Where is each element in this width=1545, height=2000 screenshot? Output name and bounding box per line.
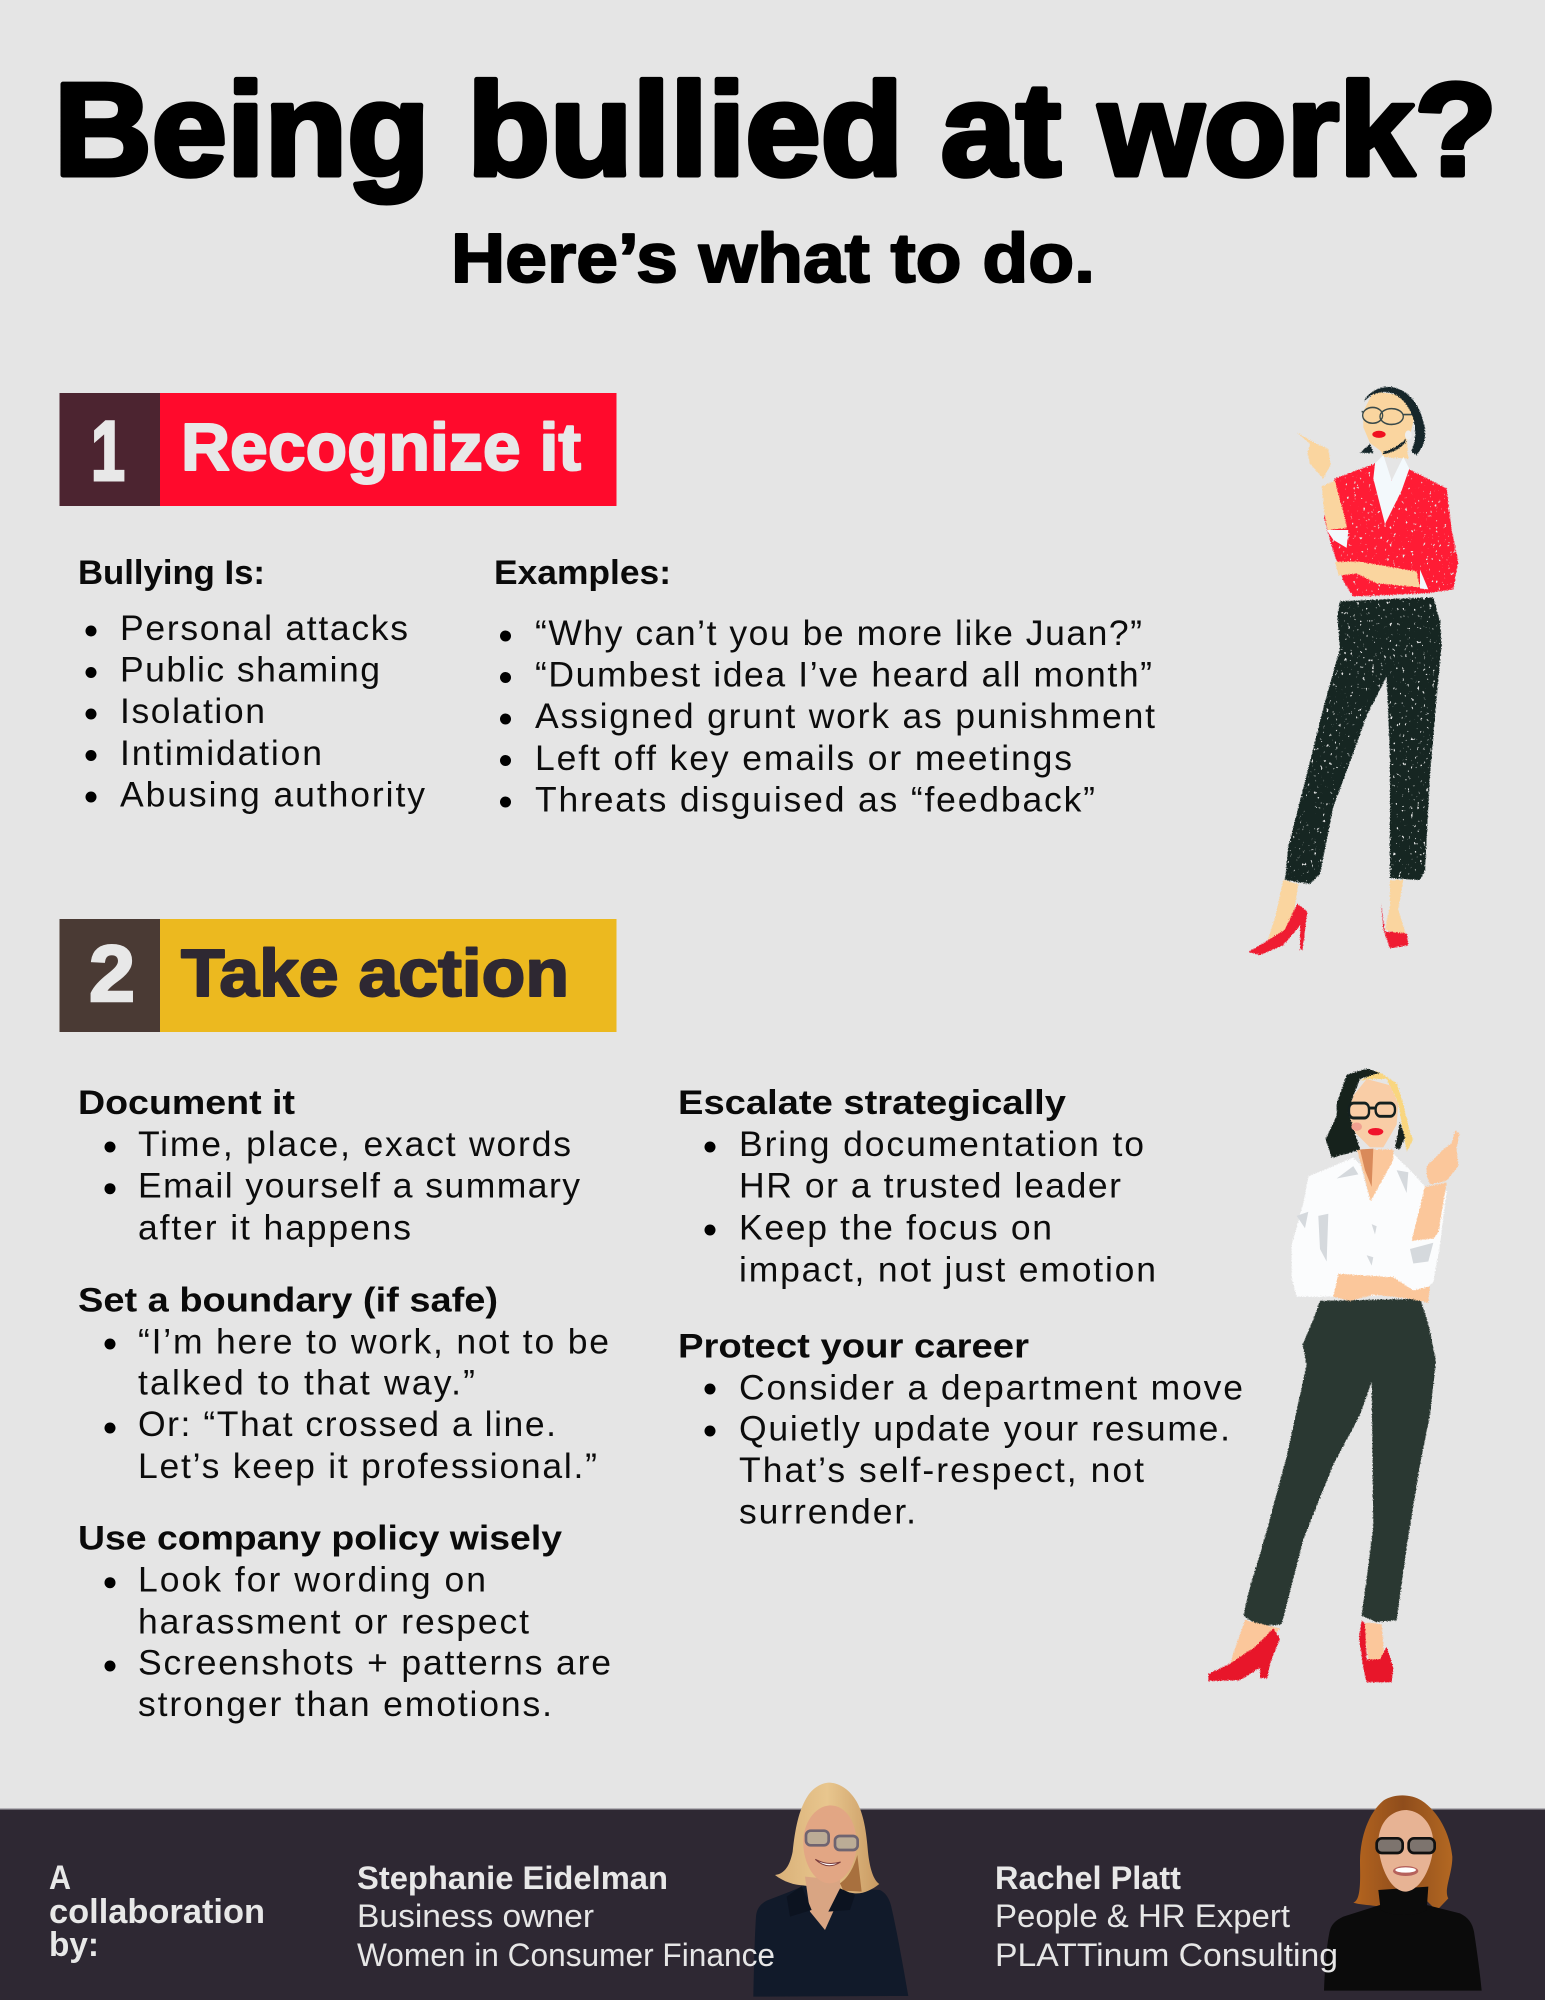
credit: Rachel Platt: Rachel Platt: [995, 1860, 1181, 1896]
protect your career: Quietly update your resume.: [739, 1408, 1230, 1448]
section 1 banner: Recognize it: [181, 410, 581, 485]
examples list: “Why can’t you be more like Juan?”: [535, 613, 1142, 653]
skin parts: [1230, 1131, 1459, 1668]
shirt folds: [1297, 1166, 1433, 1266]
protect your career: Protect your career: [678, 1327, 1029, 1365]
collaboration label: A: [49, 1859, 71, 1897]
sweater: [1324, 1905, 1482, 1991]
hair: [775, 1783, 879, 1893]
document it: after it happens: [138, 1207, 411, 1247]
glasses: [1349, 1103, 1395, 1118]
subtitle: Here’s what to do.: [451, 219, 1095, 297]
credit: Rachel Platt: PLATTinum Consulting: [995, 1937, 1338, 1973]
examples list: “Dumbest idea I’ve heard all month”: [535, 654, 1152, 694]
set a boundary: talked to that way.”: [138, 1362, 475, 1402]
bullying is list: Isolation: [120, 691, 265, 731]
footer band: [0, 1808, 1545, 2000]
trousers: [1285, 597, 1442, 884]
blonde hair: [1360, 1071, 1413, 1152]
hair: [1353, 1795, 1452, 1911]
illustration: woman in white shirt: [1208, 1069, 1459, 1682]
examples list: [494, 554, 1155, 820]
bullying is list: Intimidation: [120, 733, 322, 773]
escalate strategically: Keep the focus on: [739, 1207, 1052, 1247]
illustration: woman in red sweater: [1248, 387, 1458, 955]
document it: Email yourself a summary: [138, 1166, 580, 1206]
shirt: [753, 1886, 908, 1997]
blush and lips: [1351, 1123, 1362, 1131]
escalate strategically: [678, 1084, 1156, 1290]
collaboration label: [49, 1859, 265, 1964]
escalate strategically: impact, not just emotion: [739, 1250, 1156, 1290]
smile: [1393, 1866, 1418, 1876]
credit: Stephanie Eidelman: Stephanie Eidelman: [357, 1860, 668, 1896]
set a boundary: Or: “That crossed a line.: [138, 1404, 556, 1444]
bullying is list: Public shaming: [120, 650, 380, 690]
credit: Stephanie Eidelman: Business owner: [357, 1898, 594, 1934]
shoes: [1248, 904, 1408, 955]
set a boundary: Set a boundary (if safe): [78, 1281, 498, 1319]
escalate strategically: Escalate strategically: [678, 1084, 1066, 1122]
panel: take action: [60, 919, 1243, 1724]
use company policy wisely: Screenshots + patterns are: [138, 1643, 611, 1683]
shirt: [1292, 1154, 1447, 1297]
section 1 banner: 1: [91, 404, 125, 498]
collar: [787, 1886, 812, 1917]
collaboration label: collaboration: [49, 1893, 265, 1931]
smile: [815, 1859, 841, 1866]
examples list: Left off key emails or meetings: [535, 738, 1072, 778]
examples list: Examples:: [494, 554, 671, 592]
bullying is list: Bullying Is:: [78, 554, 265, 592]
credit: Stephanie Eidelman: [357, 1860, 775, 1973]
use company policy wisely: Use company policy wisely: [78, 1519, 562, 1557]
neck shadow: [1360, 1149, 1373, 1187]
protect your career: That’s self-respect, not: [739, 1450, 1144, 1490]
protect your career: surrender.: [739, 1491, 916, 1531]
section 1 banner: [60, 393, 616, 506]
neck: [805, 1877, 841, 1930]
document it: Time, place, exact words: [138, 1124, 571, 1164]
bullying is list: Abusing authority: [120, 774, 425, 814]
use company policy wisely: harassment or respect: [138, 1601, 529, 1641]
hair lower side shadows: [840, 1855, 862, 1892]
bullying is list: Personal attacks: [120, 608, 408, 648]
photo: Stephanie Eidelman: [753, 1783, 908, 1997]
dark hair: [1326, 1069, 1405, 1158]
examples list: Assigned grunt work as punishment: [535, 696, 1155, 736]
trousers: [1243, 1299, 1436, 1626]
collaboration label: by:: [49, 1926, 99, 1964]
bullying is list: [78, 554, 425, 814]
glasses: [806, 1831, 858, 1850]
escalate strategically: Bring documentation to: [739, 1124, 1144, 1164]
credit: Rachel Platt: [995, 1860, 1338, 1973]
set a boundary: Let’s keep it professional.”: [138, 1446, 597, 1486]
document it: Document it: [78, 1084, 296, 1122]
face: [803, 1805, 857, 1883]
protect your career: Consider a department move: [739, 1367, 1243, 1407]
section 2 banner: Take action: [181, 936, 569, 1011]
shirt collar and cuffs: [1327, 455, 1428, 589]
lips and earring: [1372, 431, 1386, 438]
credit: Stephanie Eidelman: Women in Consumer Finance: [357, 1937, 775, 1973]
document it: [78, 1084, 580, 1247]
panel: footer: [0, 1783, 1545, 2000]
photo: Rachel Platt: [1324, 1795, 1482, 1991]
title: Being bullied at work?: [54, 56, 1497, 203]
hair: [1360, 387, 1425, 455]
credit: Rachel Platt: People & HR Expert: [995, 1898, 1290, 1934]
face: [1348, 1079, 1398, 1147]
section 2 banner: [60, 919, 616, 1032]
protect your career: [678, 1327, 1243, 1531]
turtleneck: [1378, 1887, 1428, 1915]
sweater: [1324, 464, 1458, 596]
use company policy wisely: stronger than emotions.: [138, 1684, 552, 1724]
set a boundary: “I’m here to work, not to be: [138, 1321, 609, 1361]
face: [1363, 392, 1415, 453]
examples list: Threats disguised as “feedback”: [535, 780, 1095, 820]
set a boundary: [78, 1281, 609, 1486]
escalate strategically: HR or a trusted leader: [739, 1166, 1121, 1206]
glasses: [1377, 1838, 1435, 1853]
shoes: [1208, 1620, 1393, 1682]
use company policy wisely: Look for wording on: [138, 1559, 486, 1599]
use company policy wisely: [78, 1519, 611, 1724]
panel: recognize it: [60, 393, 1155, 820]
section 2 banner: 2: [89, 929, 135, 1018]
glasses: [1362, 407, 1412, 424]
skin parts: [1267, 432, 1420, 943]
face: [1378, 1810, 1433, 1892]
